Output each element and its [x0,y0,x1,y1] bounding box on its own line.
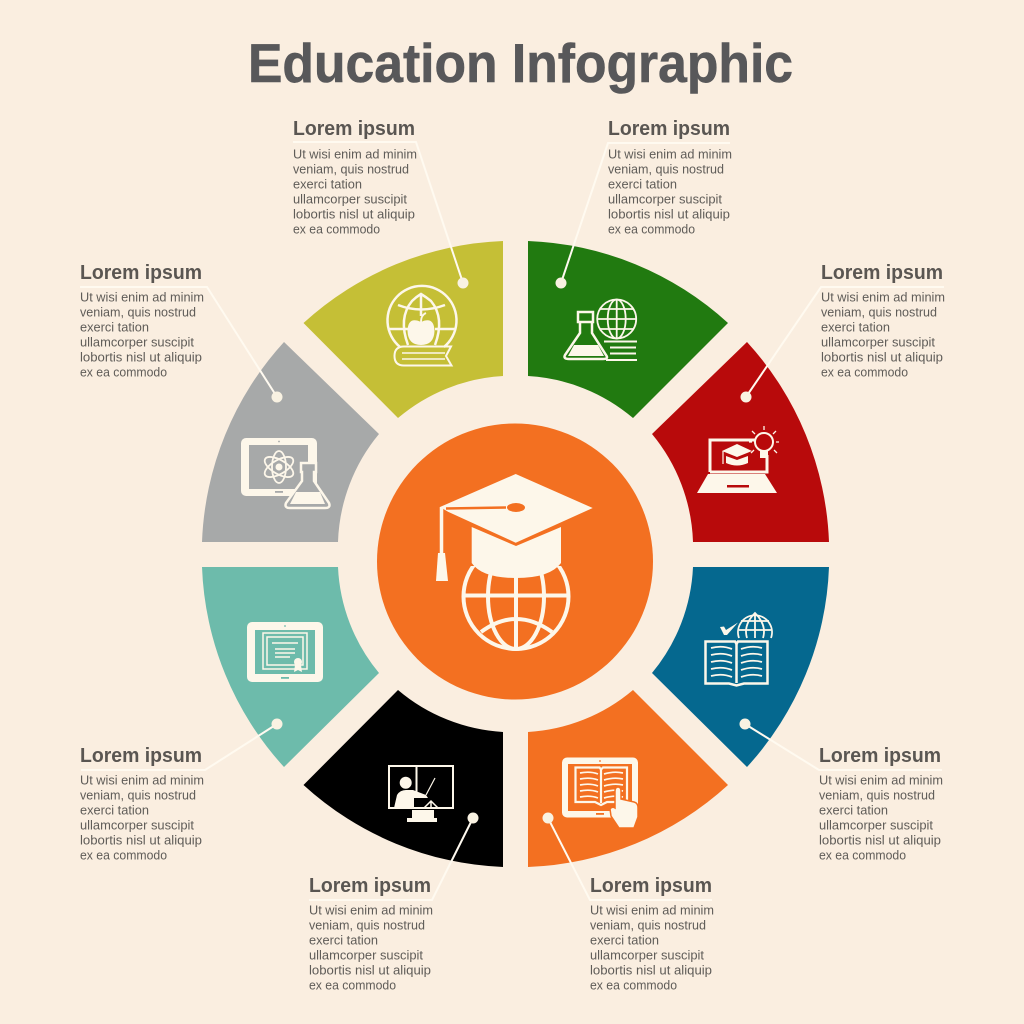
text block: bottom right: ullamcorper suscipit [590,949,705,963]
text block: upper left: ex ea commodo [80,366,167,380]
text block: top left: Ut wisi enim ad minim [293,148,417,162]
leader line: gray [80,287,277,397]
text block: upper left [80,262,204,380]
text block: bottom left [309,875,433,993]
text block: top right: Ut wisi enim ad minim [608,148,732,162]
text block: top right [608,118,732,237]
icon: tablet with open book and pointing hand [562,758,638,828]
text block: lower right: veniam, quis nostrud [819,789,935,803]
text block: bottom right: veniam, quis nostrud [590,919,706,933]
leader line: green [561,143,730,283]
text block: upper right: Ut wisi enim ad minim [821,291,945,305]
text block: top right: ullamcorper suscipit [608,193,723,207]
text block: upper right: Lorem ipsum [821,262,943,284]
text block: lower left: exerci tation [80,804,149,818]
panel: red segment [652,342,829,542]
text block: bottom left: Lorem ipsum [309,875,431,897]
text block: lower right: Lorem ipsum [819,745,941,767]
icon: globe [464,544,568,649]
text block: upper right: ullamcorper suscipit [821,336,936,350]
text block: top left: exerci tation [293,178,362,192]
text block: top left [293,118,417,237]
text block: bottom right [590,875,714,993]
text block: upper right [821,262,945,380]
text block: upper right: ex ea commodo [821,366,908,380]
text block: lower right [819,745,943,863]
text block: bottom left: Ut wisi enim ad minim [309,904,433,918]
panel: black segment [304,690,503,867]
icon: teacher at presentation board [389,766,453,822]
text block: top left: Lorem ipsum [293,118,415,140]
icon: flask, globe and book [564,299,637,360]
icon: tablet with atom and flask [241,438,330,508]
leader line: black [309,818,473,900]
text block: top left: ullamcorper suscipit [293,193,408,207]
text block: bottom right: Lorem ipsum [590,875,712,897]
leader line: olive [293,142,463,283]
text block: lower left: ex ea commodo [80,849,167,863]
text block: top left: veniam, quis nostrud [293,163,409,177]
text block: top right: exerci tation [608,178,677,192]
text block: bottom right: lobortis nisl ut aliquip [590,964,712,978]
text block: top right: lobortis nisl ut aliquip [608,208,730,222]
leader line: teal [81,724,277,770]
text block: upper right: exerci tation [821,321,890,335]
text block: lower left: veniam, quis nostrud [80,789,196,803]
panel: gray segment [202,342,379,542]
title: Education Infographic [248,32,793,94]
panel: green segment [528,241,728,418]
panel: orange segment [528,690,728,867]
text block: lower left: Lorem ipsum [80,745,202,767]
text block: lower left: lobortis nisl ut aliquip [80,834,202,848]
text block: bottom left: ullamcorper suscipit [309,949,424,963]
text block: lower right: ex ea commodo [819,849,906,863]
text block: bottom left: lobortis nisl ut aliquip [309,964,431,978]
icon: tablet with diploma certificate [247,622,323,682]
icon: laptop with cap and light bulb [697,426,779,493]
leader line: red [746,287,944,397]
text block: bottom right: exerci tation [590,934,659,948]
text block: top right: Lorem ipsum [608,118,730,140]
text block: top left: lobortis nisl ut aliquip [293,208,415,222]
icon: open book with globe and check [706,613,772,686]
text block: upper left: Ut wisi enim ad minim [80,291,204,305]
text block: bottom left: veniam, quis nostrud [309,919,425,933]
icon: graduation cap [436,474,593,581]
text block: bottom left: ex ea commodo [309,979,396,993]
text block: bottom right: Ut wisi enim ad minim [590,904,714,918]
text block: lower left: Ut wisi enim ad minim [80,774,204,788]
text block: upper right: lobortis nisl ut aliquip [821,351,943,365]
text block: top right: ex ea commodo [608,223,695,237]
leader line: orange [548,818,712,900]
text block: top right: veniam, quis nostrud [608,163,724,177]
text block: lower right: ullamcorper suscipit [819,819,934,833]
panel: olive segment [304,241,503,418]
panel: teal segment [202,567,379,767]
icon: globe, apple and book [388,286,456,366]
text block: upper left: ullamcorper suscipit [80,336,195,350]
text block: lower left [80,745,204,863]
text block: lower right: Ut wisi enim ad minim [819,774,943,788]
panel: blue segment [652,567,829,767]
text block: upper left: exerci tation [80,321,149,335]
text block: upper left: lobortis nisl ut aliquip [80,351,202,365]
leader line: blue [745,724,942,770]
text block: lower right: exerci tation [819,804,888,818]
text block: top left: ex ea commodo [293,223,380,237]
text block: lower right: lobortis nisl ut aliquip [819,834,941,848]
center circle with graduation cap and globe [377,424,653,700]
text block: upper right: veniam, quis nostrud [821,306,937,320]
text block: upper left: veniam, quis nostrud [80,306,196,320]
text block: bottom left: exerci tation [309,934,378,948]
marker dots [272,278,752,824]
text block: bottom right: ex ea commodo [590,979,677,993]
text block: upper left: Lorem ipsum [80,262,202,284]
text block: lower left: ullamcorper suscipit [80,819,195,833]
